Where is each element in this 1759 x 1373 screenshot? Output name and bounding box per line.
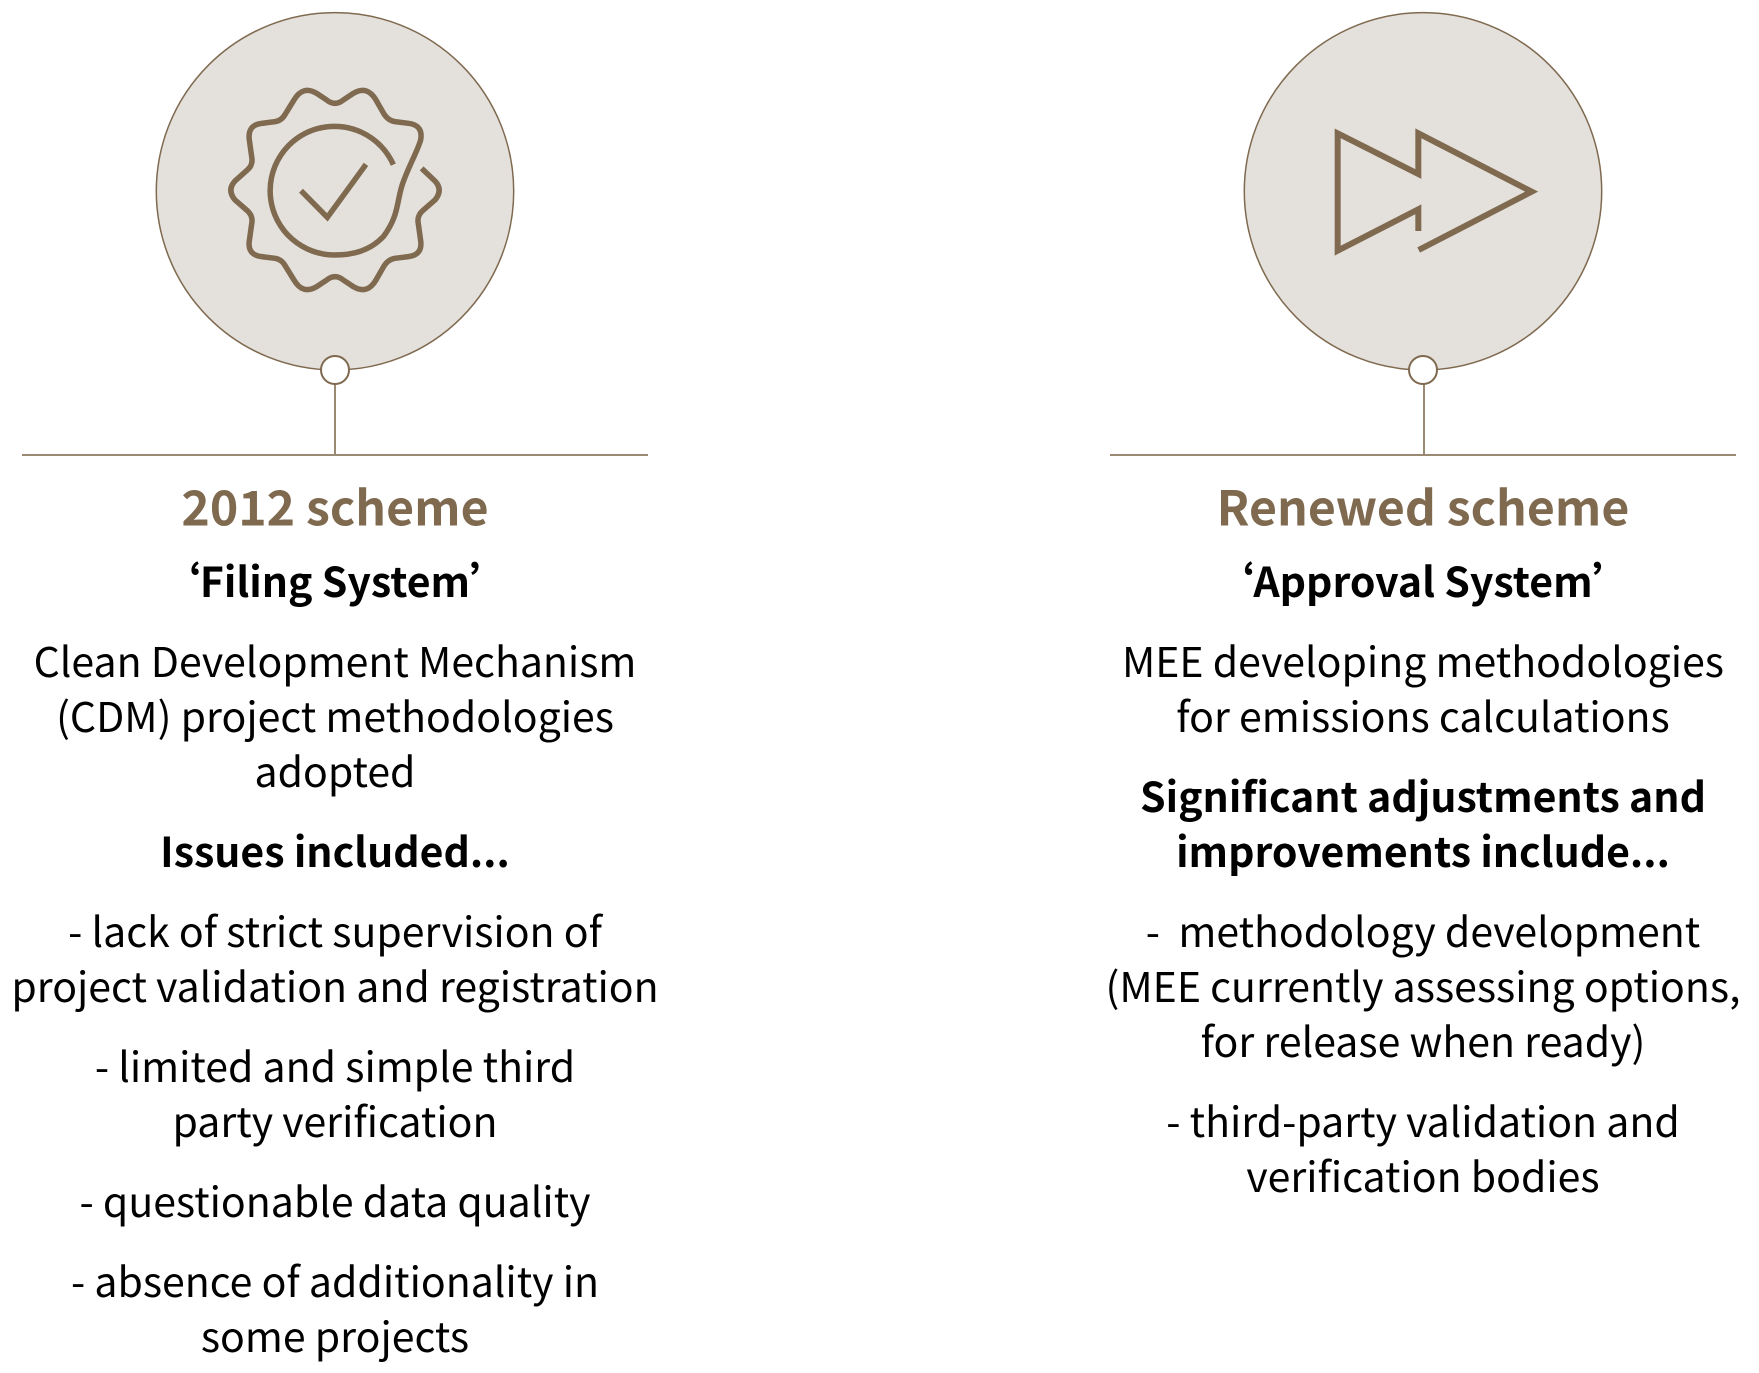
circle badge: Renewed scheme [1244,13,1602,370]
bullet: third-party bodies: verification bodies [1246,1144,1600,1204]
subheading: Approval System: ‘Approval System’ [1212,549,1634,609]
panel: Renewed scheme [1106,13,1740,1204]
bullet: lack of supervision: - lack of strict supervision of [68,899,604,959]
bullet: absence of additionality: - absence of additionality in [71,1249,599,1309]
subheading: Filing System: ‘Filing System’ [159,549,511,609]
circle badge: 2012 scheme [156,13,514,370]
subheading: Significant adjustments: Significant adjustments and [1140,764,1706,824]
bullet: third-party bodies: - third-party validation and [1166,1089,1680,1149]
bullet: methodology development: (MEE currently assessing options, [1106,954,1740,1014]
subheading: Significant adjustments: improvements include... [1176,819,1670,879]
heading: Renewed scheme: Renewed scheme [1217,470,1629,540]
bullet: data quality: - questionable data quality [79,1169,591,1229]
bullet: absence of additionality: some projects [201,1304,469,1364]
icon: approval seal with check mark [231,90,439,290]
bullet: limited verification: party verification [173,1089,497,1149]
connector: 2012 scheme [22,356,648,455]
text block: MEE methodologies: for emissions calculations [1176,684,1670,744]
bullet: limited verification [95,1034,575,1149]
text block: CDM methodologies: Clean Development Mechanism [34,629,636,689]
connector: Renewed scheme [1110,356,1736,455]
text block: CDM methodologies [34,629,636,799]
heading: 2012 scheme: 2012 scheme [181,470,489,540]
bullet: third-party bodies [1166,1089,1680,1204]
text block: MEE methodologies: MEE developing methodologies [1122,629,1724,689]
bullet: methodology development: for release when ready) [1201,1009,1645,1069]
bullet: absence of additionality [71,1249,599,1364]
subheading: Issues included: Issues included... [160,819,510,879]
text block: CDM methodologies: (CDM) project methodologies [56,684,614,744]
icon: fast-forward arrows [1338,133,1532,251]
text block: CDM methodologies: adopted [255,739,415,799]
bullet: limited verification: - limited and simple third [95,1034,575,1094]
bullet: lack of supervision: project validation and registration [11,954,659,1014]
bullet: methodology development: - methodology development [1146,899,1700,959]
text block: MEE methodologies [1122,629,1724,744]
subheading: Significant adjustments [1140,764,1706,879]
panel: 2012 scheme [11,13,659,1364]
bullet: lack of supervision [11,899,659,1014]
bullet: methodology development [1106,899,1740,1069]
